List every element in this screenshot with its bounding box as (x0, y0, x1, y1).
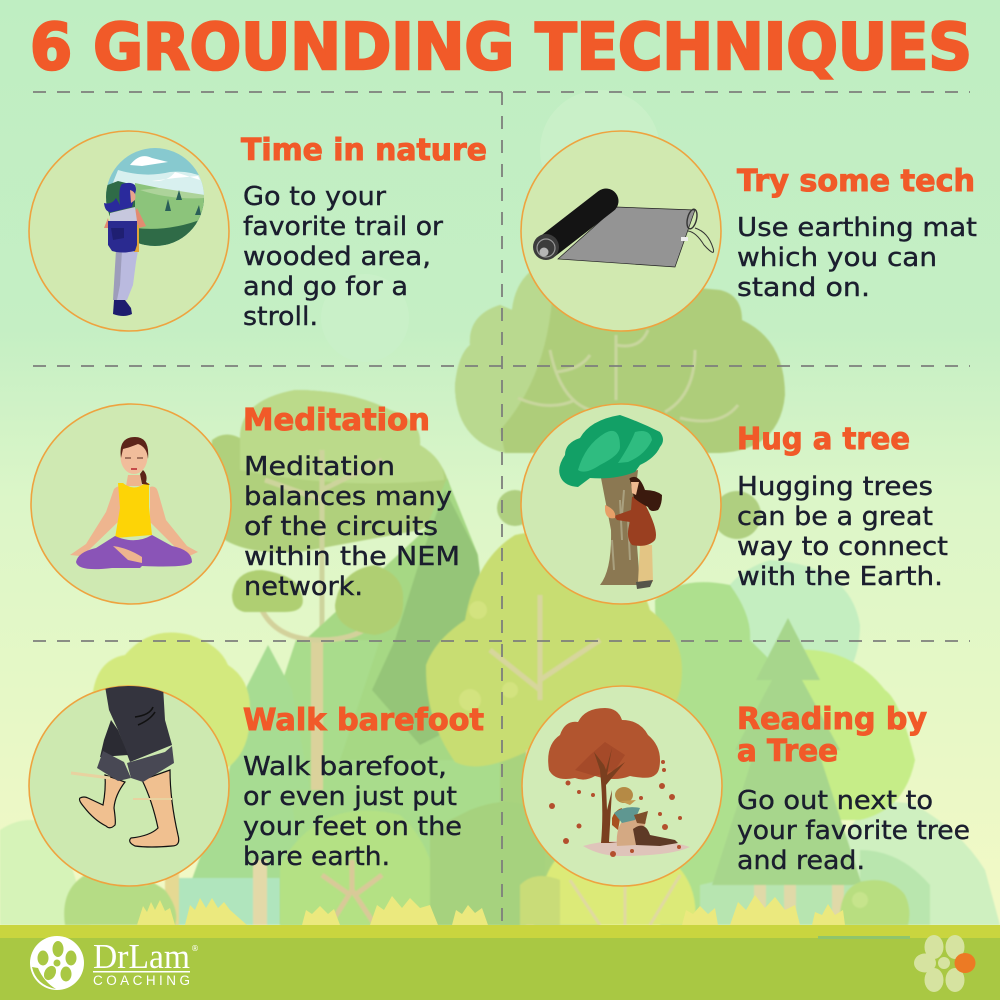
title: 6 GROUNDING TECHNIQUES (30, 11, 972, 85)
tree: right conifer (712, 618, 862, 925)
body text: of the circuits (244, 512, 438, 542)
panel: walk barefoot (29, 686, 484, 886)
dashed dividers (33, 92, 970, 925)
heading: Walk barefoot (243, 703, 484, 738)
icon: woman meditating (31, 404, 231, 604)
tree: dark conifer (175, 478, 520, 925)
body text (243, 752, 462, 872)
body text: or even just put (243, 782, 457, 812)
body text: and read. (737, 846, 865, 876)
heading: Try some tech (737, 164, 975, 199)
heading: a Tree (737, 734, 838, 769)
body text (243, 182, 443, 332)
body text: Use earthing mat (737, 213, 977, 243)
body text: can be a great (737, 502, 933, 532)
tree: big upper crown (455, 272, 785, 539)
heading: Time in nature (241, 133, 487, 168)
icon: hiker (29, 131, 229, 331)
tree: centre crown (426, 533, 682, 925)
body text: favorite trail or (243, 212, 443, 242)
tree: mint and lime right canopies (655, 560, 1000, 925)
body text: Meditation (244, 452, 395, 482)
body text (737, 786, 970, 876)
tree: bottom left crown (0, 632, 250, 925)
logo subtitle: COACHING (93, 973, 190, 988)
body text: Go to your (243, 182, 386, 212)
icon: person reading under autumn tree (522, 686, 722, 886)
bushes (64, 802, 909, 925)
body text: bare earth. (243, 842, 390, 872)
icon: woman hugging tree (521, 404, 721, 604)
body text: stroll. (243, 302, 318, 332)
body text: your favorite tree (737, 816, 970, 846)
logo text: DrLam (93, 937, 190, 976)
body text: stand on. (737, 273, 870, 303)
heading: Reading by (737, 702, 927, 737)
body text: wooded area, (243, 242, 431, 272)
body text: way to connect (737, 532, 948, 562)
body text: and go for a (243, 272, 408, 302)
logo mark (30, 936, 84, 990)
body text: within the NEM (244, 542, 460, 572)
panel: reading by a tree (522, 686, 970, 886)
icon: earthing mat (521, 131, 721, 331)
panel: meditation (31, 403, 460, 604)
body text (737, 472, 948, 592)
body text: Hugging trees (737, 472, 933, 502)
body text: which you can (737, 243, 937, 273)
body text: your feet on the (243, 812, 462, 842)
body text: Walk barefoot, (243, 752, 447, 782)
grass tufts (137, 895, 845, 925)
flower emblem (914, 935, 976, 992)
body text: with the Earth. (737, 562, 943, 592)
tree: left crown (210, 390, 450, 640)
panel: hug a tree (521, 404, 948, 604)
heading: Hug a tree (737, 422, 910, 457)
footer ground (0, 925, 1000, 1000)
body text (244, 452, 460, 602)
body text: balances many (244, 482, 452, 512)
logo: DrLam Coaching (30, 936, 199, 990)
panel: time in nature (29, 131, 487, 332)
body text: network. (244, 572, 363, 602)
body text (737, 213, 977, 303)
body text: Go out next to (737, 786, 933, 816)
heading: Meditation (243, 403, 430, 438)
heading (737, 702, 927, 769)
icon: bare feet and rolled trousers (29, 686, 229, 886)
registered mark: ® (191, 944, 199, 953)
panel: try some tech (521, 131, 977, 331)
